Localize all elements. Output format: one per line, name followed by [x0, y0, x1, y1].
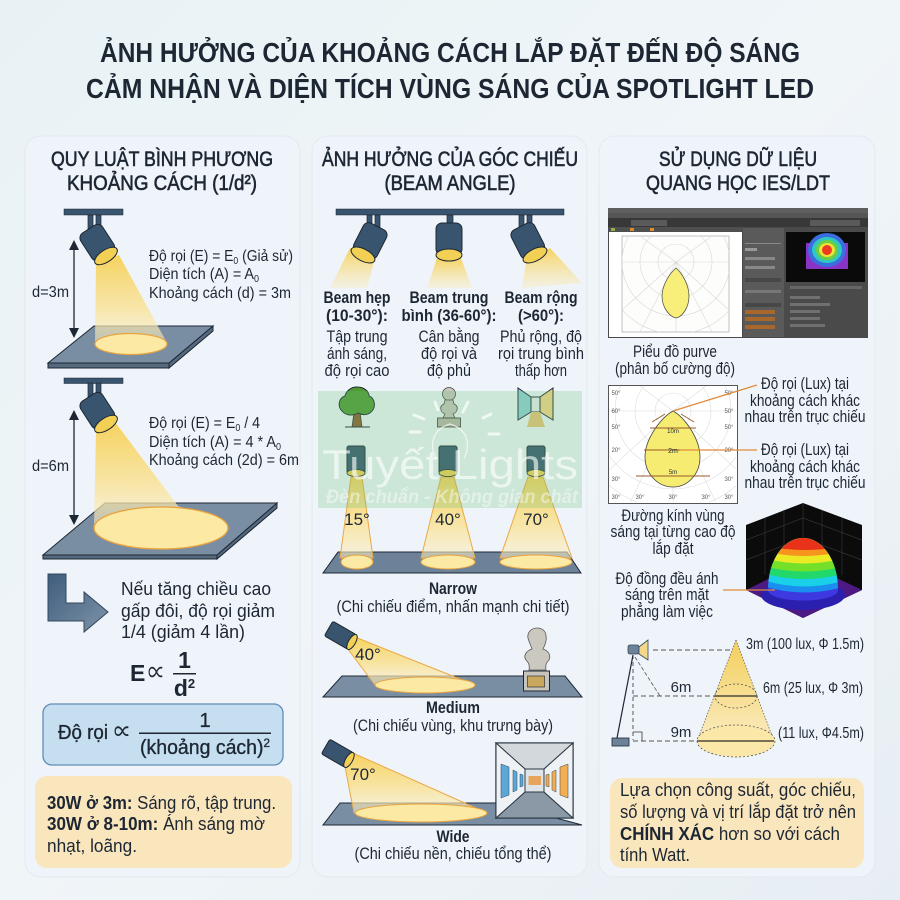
- formula: E proportional to 1/d squared: d: [174, 675, 188, 701]
- note: 30W comparison: 30W ở 3m: Sáng rõ, tập trung.: [47, 792, 276, 813]
- formula box: illuminance vs distance: [43, 704, 283, 765]
- diagram: light cone at 3m, 6m, 9m: 6m: [671, 679, 691, 696]
- chart: polar light distribution: 20°: [611, 448, 621, 454]
- column: medium beam: [402, 289, 496, 380]
- diagram: light cone at 3m, 6m, 9m: 9m: [671, 724, 691, 741]
- caption: beam diameter: sáng tại từng cao độ: [610, 523, 736, 541]
- text: values at 6m: Diện tích (A) = 4 * A: [149, 434, 290, 451]
- text: values at 6m: [149, 415, 299, 469]
- heading: IES/LDT: [646, 147, 830, 195]
- title: ẢNH HƯỞNG CỦA KHOẢNG CÁCH LẮP ĐẶT ĐẾN ĐỘ SÁNG: [100, 36, 800, 68]
- panel: IES/LDT photometric data: [575, 136, 875, 877]
- diagram: spotlight at 6m: [32, 378, 277, 559]
- icon: tree: [339, 387, 374, 427]
- text: values at 3m: [149, 248, 293, 302]
- formula box: illuminance vs distance: Độ rọi: [58, 722, 108, 744]
- chart: polar light distribution: 5m: [669, 470, 677, 476]
- diagram: medium beam on statue: [323, 621, 582, 697]
- caption: wide: Wide: [436, 828, 470, 846]
- caption: beam diameter: lắp đặt: [652, 539, 694, 558]
- formula: E proportional to 1/d squared: ∝: [148, 658, 165, 688]
- caption: intensity curve: Piểu đồ purve: [633, 343, 717, 361]
- watermark: [318, 391, 582, 508]
- callout: uniformity: [616, 570, 775, 621]
- heading: IES/LDT: SỬ DỤNG DỮ LIỆU: [659, 147, 817, 171]
- heading: beam angle: (BEAM ANGLE): [384, 172, 516, 195]
- chart: polar light distribution: 30°: [724, 495, 734, 501]
- diagram: beam angle comparison 15, 40, 70: 15°: [344, 510, 370, 529]
- diagram: medium beam on statue: 40°: [355, 645, 381, 664]
- chart: polar light distribution: 50°: [724, 391, 734, 397]
- formula: E proportional to 1/d squared: [130, 647, 196, 701]
- callout: lux on axis 1: khoảng cách khác: [750, 392, 860, 410]
- text: values at 3m: Khoảng cách (d) = 3m: [149, 285, 291, 302]
- chart: polar light distribution: 30°: [635, 495, 645, 501]
- diagram: beam angle comparison 15, 40, 70: 70°: [523, 510, 549, 529]
- chart: polar light distribution: 30°: [611, 495, 621, 501]
- text: values at 3m: (Giả sử): [238, 248, 293, 265]
- diagram: wide beam on gallery: 70°: [350, 765, 376, 784]
- chart: polar light distribution: 10m: [667, 429, 679, 435]
- callout: lux on axis 1: Độ rọi (Lux) tại: [761, 375, 849, 393]
- callout: uniformity: phẳng làm việc: [621, 602, 713, 621]
- caption: beam diameter: [610, 507, 736, 558]
- diagram: beam angle comparison 15, 40, 70: [323, 446, 581, 573]
- heading: IES/LDT: QUANG HỌC IES/LDT: [646, 172, 830, 195]
- heading: inverse square law: QUY LUẬT BÌNH PHƯƠNG: [51, 148, 273, 171]
- callout: uniformity: Độ đồng đều ánh: [616, 570, 718, 588]
- diagram: spotlight at 6m: d=6m: [32, 458, 69, 475]
- caption: intensity curve: [615, 343, 735, 378]
- text: values at 6m: Độ rọi (E) = E: [149, 415, 246, 432]
- chart: polar light distribution: 50°: [611, 425, 621, 431]
- text: values at 6m: 0: [276, 442, 281, 453]
- note: accuracy: tính Watt.: [620, 844, 690, 865]
- diagram: light cone at 3m, 6m, 9m: (11 lux, Φ4.5m): [778, 725, 864, 742]
- column: narrow beam: Beam hẹp: [324, 289, 390, 307]
- note: 30W comparison: nhạt, loãng.: [47, 835, 137, 856]
- formula: E proportional to 1/d squared: 2: [188, 676, 195, 691]
- chart: polar light distribution: 50°: [724, 425, 734, 431]
- callout: lux on axis 2: khoảng cách khác: [750, 458, 860, 476]
- watermark: Tuyết Lights: [322, 441, 578, 488]
- note: accuracy: CHÍNH XÁC hơn so với cách: [620, 823, 840, 844]
- note: 30W comparison: [35, 776, 292, 868]
- callout: lux on axis 2: nhau trên trục chiếu: [744, 474, 866, 492]
- icon: gallery: [518, 388, 553, 427]
- formula: E proportional to 1/d squared: E: [130, 660, 145, 686]
- column: medium beam: bình (36-60°):: [402, 307, 496, 325]
- panel: inverse square law: [25, 136, 300, 877]
- diagram: track with three spotlights: [330, 209, 582, 288]
- heading: beam angle: [322, 147, 578, 195]
- heading: beam angle: ẢNH HƯỞNG CỦA GÓC CHIẾU: [322, 147, 578, 171]
- text: values at 6m: / 4: [240, 415, 260, 432]
- heading: inverse square law: KHOẢNG CÁCH (1/d²): [67, 172, 257, 195]
- text: doubling height: 1/4 (giảm 4 lần): [121, 621, 245, 642]
- column: wide beam: Beam rộng: [504, 289, 578, 307]
- chart: polar light distribution: 2m: [668, 448, 678, 455]
- chart: polar light distribution: 30°: [701, 495, 711, 501]
- callout: lux on axis 2: Độ rọi (Lux) tại: [761, 441, 849, 459]
- formula: E proportional to 1/d squared: 1: [178, 647, 191, 673]
- caption: medium: (Chi chiếu vùng, khu trưng bày): [353, 717, 553, 735]
- title: CẢM NHẬN VÀ DIỆN TÍCH VÙNG SÁNG CỦA SPOTLIGHT LED: [86, 72, 814, 104]
- column: narrow beam: ánh sáng,: [327, 345, 387, 363]
- note: accuracy: Lựa chọn công suất, góc chiếu,: [620, 779, 856, 800]
- diagram: light cone at 3m, 6m, 9m: 6m (25 lux, Φ 3m): [763, 680, 863, 697]
- chart: polar light distribution: 60°: [611, 409, 621, 415]
- chart: polar light distribution: [608, 385, 738, 504]
- diagram: light cone at 3m, 6m, 9m: [612, 636, 864, 757]
- text: doubling height: [121, 578, 275, 642]
- note: 30W comparison: 30W ở 8-10m: Ánh sáng mờ: [47, 813, 265, 834]
- text: values at 3m: Diện tích (A) = A: [149, 266, 266, 283]
- column: wide beam: [498, 289, 584, 380]
- screenshot: photometric software: [608, 208, 868, 338]
- column: medium beam: độ phủ: [427, 362, 471, 380]
- chart: polar light distribution: 20°: [724, 448, 734, 454]
- icon: bent arrow: [48, 574, 108, 632]
- formula box: illuminance vs distance: ∝: [114, 719, 131, 746]
- note: accuracy: số lượng và vị trí lắp đặt trở nên: [620, 801, 856, 822]
- callout: uniformity: sáng trên mặt: [625, 586, 709, 604]
- caption: beam diameter: Đường kính vùng: [622, 507, 724, 525]
- caption: wide: (Chi chiếu nền, chiếu tổng thể): [354, 845, 552, 863]
- chart: polar light distribution: 30°: [668, 495, 678, 501]
- text: doubling height: Nếu tăng chiều cao: [121, 578, 271, 599]
- column: wide beam: (>60°):: [518, 307, 564, 325]
- column: medium beam: Cân bằng: [418, 327, 480, 346]
- column: medium beam: Beam trung: [410, 289, 488, 307]
- diagram: wide beam on gallery: [321, 739, 582, 825]
- heading: inverse square law: [51, 148, 273, 195]
- icon: gallery room: [496, 743, 573, 818]
- caption: narrow: Narrow: [429, 580, 477, 598]
- column: wide beam: rọi trung bình: [498, 345, 584, 363]
- callout: lux on axis 1: nhau trên trục chiếu: [744, 408, 866, 426]
- diagram: beam angle comparison 15, 40, 70: 40°: [435, 510, 461, 529]
- column: narrow beam: Tập trung: [326, 328, 388, 346]
- diagram: spotlight at 3m: d=3m: [32, 284, 69, 301]
- caption: medium: [353, 699, 553, 735]
- diagram: spotlight at 3m: [32, 209, 213, 368]
- formula box: illuminance vs distance: (khoảng cách): [140, 737, 267, 759]
- caption: narrow: [336, 580, 570, 616]
- formula box: illuminance vs distance: 1: [199, 710, 211, 732]
- formula box: illuminance vs distance: 2: [263, 736, 270, 750]
- callout: lux on axis 1: [673, 375, 866, 426]
- caption: medium: Medium: [426, 699, 480, 717]
- caption: narrow: (Chi chiếu điểm, nhấn mạnh chi tiết): [336, 598, 570, 616]
- chart: polar light distribution: 30°: [611, 477, 621, 483]
- chart: polar light distribution: 50°: [611, 391, 621, 397]
- diagram: light cone at 3m, 6m, 9m: 3m (100 lux, Φ 1.5m): [746, 636, 864, 653]
- text: values at 3m: Độ rọi (E) = E: [149, 248, 246, 265]
- chart: 3D uniformity dome: [746, 503, 862, 618]
- chart: polar light distribution: 50°: [724, 409, 734, 415]
- callout: lux on axis 2: [680, 441, 866, 492]
- column: medium beam: độ rọi và: [421, 345, 478, 363]
- text: values at 6m: Khoảng cách (2d) = 6m: [149, 452, 299, 469]
- panel: beam angle: [312, 136, 587, 877]
- note: accuracy: [610, 778, 864, 868]
- icon: bust: [438, 388, 460, 427]
- chart: polar light distribution: 30°: [724, 477, 734, 483]
- caption: intensity curve: (phân bố cường độ): [615, 360, 735, 378]
- text: values at 6m: 0: [235, 423, 241, 434]
- column: narrow beam: [324, 289, 390, 380]
- caption: wide: [354, 828, 552, 863]
- title: [86, 36, 814, 104]
- text: doubling height: gấp đôi, độ rọi giảm: [121, 600, 275, 621]
- column: narrow beam: (10-30°):: [326, 307, 388, 325]
- text: values at 3m: 0: [254, 274, 259, 285]
- column: narrow beam: độ rọi cao: [324, 362, 390, 380]
- watermark: Đèn chuẩn - Không gian chất: [326, 487, 579, 508]
- column: wide beam: thấp hơn: [515, 362, 567, 380]
- text: values at 3m: 0: [233, 256, 239, 267]
- column: wide beam: Phủ rộng, độ: [500, 328, 582, 346]
